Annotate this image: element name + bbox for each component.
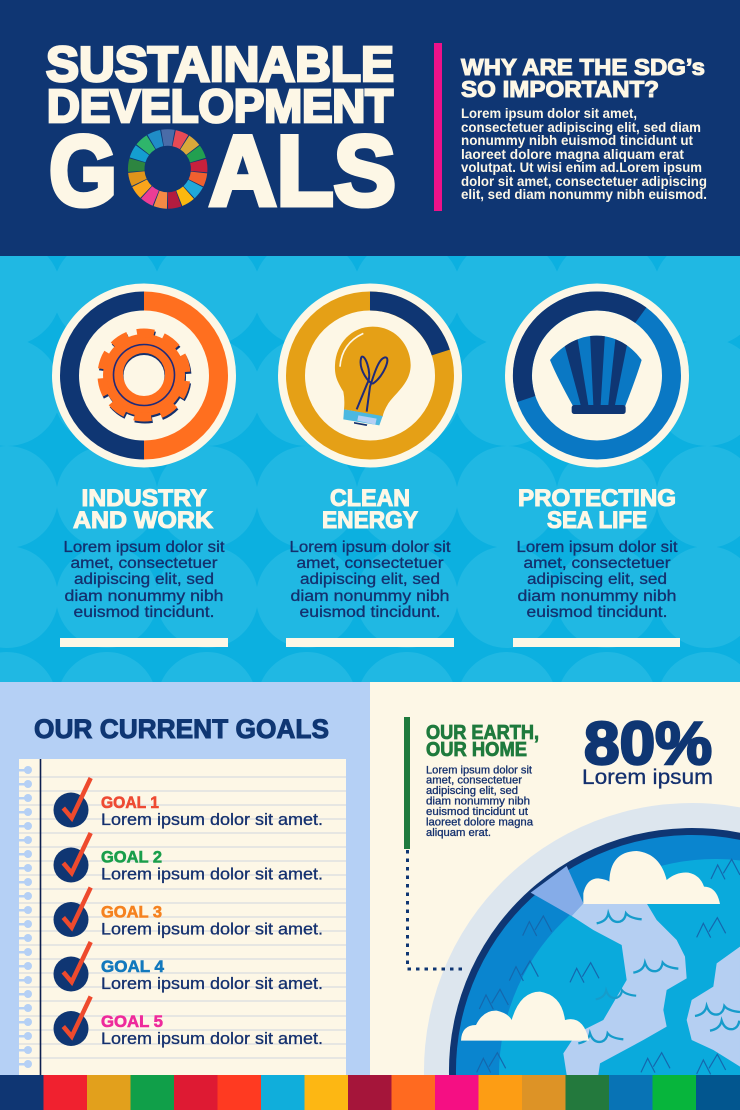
column text: protecting sea life [513, 485, 680, 647]
text block: header description: Lorem ipsum dolor sit amet, [461, 106, 637, 121]
goal 5: GOAL 5 [101, 1012, 163, 1031]
text block: header description: dolor sit amet, consectetuer adipiscing [461, 174, 707, 189]
goal 2: GOAL 2 [101, 848, 162, 867]
column text: clean energy: Lorem ipsum dolor sit [290, 539, 451, 556]
column text: clean energy: ENERGY [322, 507, 418, 534]
column text: clean energy: diam nonummy nibh [290, 588, 450, 605]
green accent bar [404, 717, 410, 849]
dotted connector [408, 850, 466, 969]
icon: SDG colour wheel [123, 124, 212, 214]
icon: lower cloud [461, 992, 589, 1041]
text block: header description: consectetuer adipiscing elit, sed diam [461, 120, 701, 135]
column text: protecting sea life: diam nonummy nibh [518, 588, 676, 605]
column text: industry and work: adipiscing elit, sed [74, 571, 214, 588]
icon: upper cloud [583, 851, 720, 904]
text block: earth description: amet, consectetuer [426, 774, 522, 786]
text block: header description: elit, sed diam nonummy nibh euismod. [461, 187, 707, 202]
goal 4: Lorem ipsum dolor sit amet. [101, 974, 323, 993]
heading: why are the SDGs so important [461, 54, 705, 102]
icon: gear in ring [52, 284, 236, 468]
column text: industry and work: euismod tincidunt. [74, 604, 214, 621]
text block: earth description: adipiscing elit, sed [426, 785, 518, 797]
column text: industry and work: diam nonummy nibh [64, 588, 223, 605]
goal 2 [54, 833, 323, 884]
goal 1 [54, 778, 323, 829]
goal 5 [54, 996, 323, 1048]
column text: clean energy: amet, consectetuer [296, 555, 444, 572]
text block: header description: laoreet dolore magna aliquam erat [461, 147, 684, 162]
heading: why are the SDGs so important: WHY ARE THE SDG’s [461, 54, 705, 80]
column text: protecting sea life: adipiscing elit, sed [527, 571, 667, 588]
heading: our earth our home: OUR EARTH, [426, 722, 539, 744]
heading: our earth our home: OUR HOME [426, 739, 527, 761]
column text: clean energy [286, 485, 454, 647]
panel: our earth [370, 682, 740, 1075]
goal 5: Lorem ipsum dolor sit amet. [101, 1029, 323, 1048]
column text: clean energy: euismod tincidunt. [300, 604, 440, 621]
statistic: 80 percent: 80% [584, 710, 712, 777]
icon: light bulb in ring [278, 284, 462, 468]
panel: header [0, 0, 740, 256]
goal 3: Lorem ipsum dolor sit amet. [101, 919, 323, 938]
title: sustainable development goals: DEVELOPMENT [47, 80, 393, 132]
text block: header description: nonummy nibh euismod tincidunt ut [461, 133, 693, 148]
column text: clean energy: CLEAN [330, 485, 410, 512]
heading: our current goals: OUR CURRENT GOALS [34, 714, 329, 744]
column text: industry and work: Lorem ipsum dolor sit [64, 539, 225, 556]
goal 1: GOAL 1 [101, 793, 159, 812]
earth illustration [424, 803, 740, 1075]
goal 2: Lorem ipsum dolor sit amet. [101, 865, 323, 884]
column text: clean energy: adipiscing elit, sed [300, 571, 440, 588]
panel: our current goals [0, 682, 371, 1075]
column text: protecting sea life: Lorem ipsum dolor sit [516, 539, 678, 556]
panel: three goals on scalloped blue background [0, 238, 740, 682]
title: sustainable development goals: G [49, 115, 117, 226]
text block: earth description: Lorem ipsum dolor sit [426, 764, 532, 776]
text block: header description [461, 106, 707, 202]
statistic: 80 percent: Lorem ipsum [582, 766, 713, 789]
column text: protecting sea life: PROTECTING [518, 485, 676, 512]
goal 3: GOAL 3 [101, 902, 162, 921]
goal 4: GOAL 4 [101, 957, 165, 976]
pink accent bar [434, 43, 442, 211]
title: sustainable development goals [46, 38, 396, 226]
notebook page [19, 759, 346, 1075]
text block: earth description: diam nonummy nibh [426, 796, 530, 808]
column text: protecting sea life: amet, consectetuer [524, 555, 670, 572]
text block: earth description: laoreet dolore magna [426, 816, 534, 828]
column text: industry and work [60, 485, 228, 647]
column text: protecting sea life: euismod tincidunt. [526, 604, 668, 621]
goal 4 [54, 942, 323, 993]
title: sustainable development goals: ALS [209, 115, 396, 226]
column text: industry and work: INDUSTRY [82, 485, 206, 512]
text block: earth description: aliquam erat. [426, 827, 491, 839]
text block: header description: volutpat. Ut wisi enim ad.Lorem ipsum [461, 160, 702, 175]
column text: industry and work: AND WORK [73, 507, 214, 534]
text block: earth description [426, 764, 534, 839]
text block: earth description: euismod tincidunt ut [426, 806, 528, 818]
column text: industry and work: amet, consectetuer [70, 555, 218, 572]
goal 3 [54, 888, 323, 938]
column text: protecting sea life: SEA LIFE [547, 507, 647, 534]
icon: sea shell in ring [505, 284, 689, 468]
title: sustainable development goals: SUSTAINABLE [46, 38, 394, 92]
colour stripe footer [0, 1075, 740, 1110]
heading: our earth our home [426, 722, 539, 761]
heading: why are the SDGs so important: SO IMPORTANT? [461, 76, 659, 102]
goal 1: Lorem ipsum dolor sit amet. [101, 810, 323, 829]
